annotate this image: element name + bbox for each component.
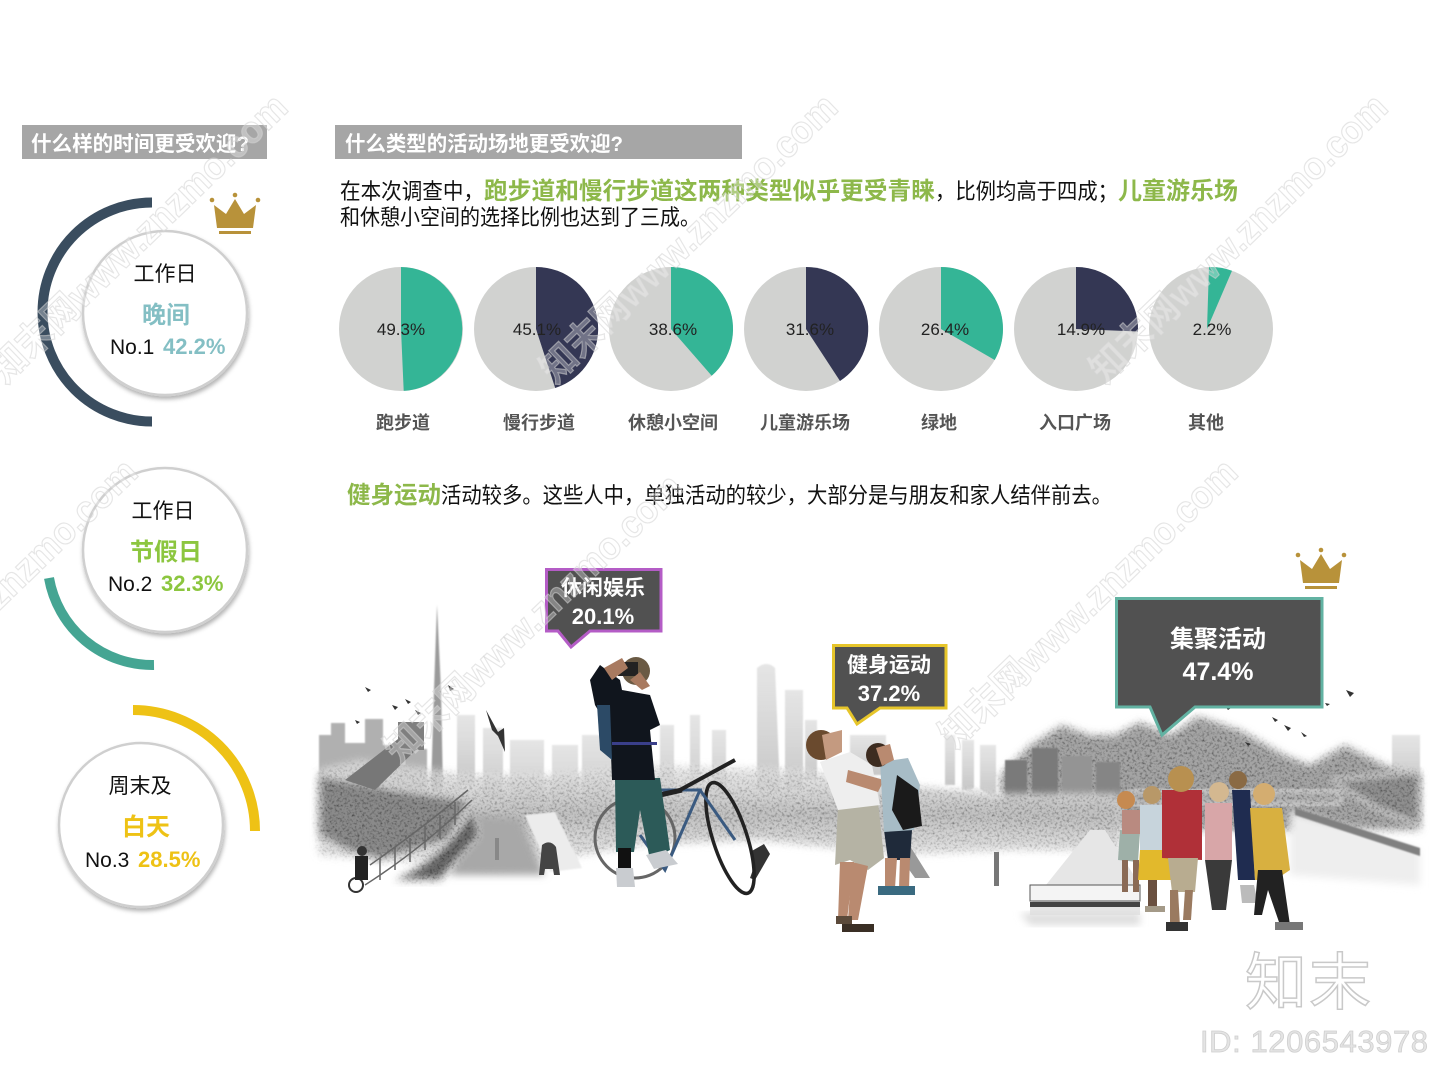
group of people	[1117, 766, 1303, 931]
birds	[355, 685, 1354, 752]
watermark: diagonal site marks: 知末网www.znzmo.com	[377, 466, 691, 771]
pie chart: entrance plaza: 入口广场	[1039, 413, 1111, 433]
callout: gathering 47.4%	[1116, 598, 1322, 735]
pie chart: playground: 儿童游乐场	[760, 412, 850, 433]
pie chart: green space: 26.4%	[921, 320, 969, 339]
city blocks right	[941, 748, 1120, 819]
card: No.2 weekday holiday: 节假日	[130, 539, 202, 566]
card: No.3 weekend daytime	[59, 710, 255, 907]
collage: city and park panorama	[319, 605, 1420, 932]
card: No.1 weekday evening	[43, 202, 247, 422]
heading: venue: 什么类型的活动场地更受欢迎?	[345, 133, 623, 156]
callout: leisure 20.1%: 休闲娱乐	[561, 577, 645, 600]
callout: gathering 47.4%: 47.4%	[1183, 658, 1253, 686]
man in white t-shirt	[806, 730, 884, 932]
pie chart: slow walk	[474, 267, 598, 433]
skyline	[319, 605, 1420, 840]
pie chart: rest space: 38.6%	[649, 320, 697, 339]
river and paths	[450, 815, 545, 875]
text block: venue summary: 在本次调查中，	[340, 179, 484, 204]
card: No.2 weekday holiday: No.2	[108, 573, 152, 596]
card: No.2 weekday holiday	[49, 468, 247, 665]
pie chart: rest space	[609, 267, 733, 433]
steel structure	[345, 722, 424, 790]
callout: leisure 20.1%	[546, 570, 661, 647]
logo: znzmo mark and ID	[1200, 949, 1428, 1059]
pie chart: green space: 绿地	[921, 413, 957, 433]
pie chart: playground: 31.6%	[786, 320, 834, 339]
watermark: diagonal site marks: 知末网www.znzmo.com	[932, 451, 1246, 756]
card: No.3 weekend daytime: 周末及	[108, 775, 172, 798]
card: No.3 weekend daytime: No.3	[85, 849, 129, 872]
icon: crown first place	[210, 193, 260, 234]
small figures	[539, 842, 560, 875]
vegetation band	[319, 760, 1120, 870]
pie chart: rest space: 休憩小空间	[628, 412, 718, 433]
walkway and deck	[888, 830, 930, 878]
card: No.2 weekday holiday: 工作日	[132, 500, 194, 523]
heading: venue	[335, 125, 742, 159]
text block: venue summary: ，比例均高于四成；	[935, 179, 1118, 204]
pie chart: slow walk: 慢行步道	[503, 412, 575, 433]
card: No.1 weekday evening: 42.2%	[163, 334, 225, 359]
logo: znzmo mark and ID: 知末	[1245, 949, 1371, 1018]
text block: activity summary: 健身运动	[347, 482, 441, 509]
text block: venue summary: 儿童游乐场	[1118, 177, 1238, 205]
photographer	[590, 657, 678, 887]
pie chart: other: 其他	[1188, 413, 1224, 433]
panel: venue preference	[335, 125, 1273, 509]
callout: leisure 20.1%: 20.1%	[572, 604, 634, 629]
icon: crown top activity	[1296, 548, 1346, 589]
pie chart: running track: 49.3%	[377, 320, 425, 339]
pie chart: other: 2.2%	[1193, 320, 1231, 339]
pie chart: entrance plaza	[1014, 267, 1138, 433]
text block: venue summary: 和休憩小空间的选择比例也达到了三成。	[340, 205, 700, 230]
bridge	[395, 810, 480, 880]
watermark: diagonal site marks: 知末网www.znzmo.com	[1082, 86, 1396, 391]
logo: znzmo mark and ID: ID: 1206543978	[1200, 1024, 1428, 1059]
heading: time	[22, 125, 267, 159]
card: No.3 weekend daytime: 白天	[122, 814, 170, 841]
card: No.1 weekday evening: No.1	[110, 336, 154, 359]
pie chart: entrance plaza: 14.9%	[1057, 320, 1105, 339]
bicycle	[595, 760, 764, 898]
pie chart: playground	[744, 267, 868, 433]
mountains	[1000, 716, 1420, 830]
text block: activity summary: 活动较多。这些人中，单独活动的较少，大部分是与朋友和家人结伴前去。	[441, 483, 1112, 508]
card: No.1 weekday evening: 工作日	[134, 263, 196, 286]
pie chart: running track	[339, 267, 463, 433]
callout: fitness 37.2%: 健身运动	[847, 654, 931, 677]
watermark: diagonal site marks: 知末网www.znzmo.com	[532, 86, 846, 391]
callout: gathering 47.4%: 集聚活动	[1170, 626, 1266, 653]
text block: venue summary	[340, 177, 1238, 230]
callout: fitness 37.2%: 37.2%	[858, 681, 920, 706]
panel: time preference	[22, 125, 267, 907]
card: No.3 weekend daytime: 28.5%	[138, 847, 200, 872]
heading: time: 什么样的时间更受欢迎?	[31, 133, 249, 156]
cyclist small	[349, 846, 368, 892]
pie chart: running track: 跑步道	[376, 412, 430, 433]
pie chart: slow walk: 45.1%	[513, 320, 561, 339]
man with black bag	[866, 743, 922, 895]
callout: fitness 37.2%	[834, 646, 946, 724]
card: No.2 weekday holiday: 32.3%	[161, 571, 223, 596]
card: No.1 weekday evening: 晚间	[142, 302, 190, 329]
watermark: diagonal site marks	[0, 86, 1396, 771]
pie chart: other	[1149, 267, 1273, 433]
pie chart: green space	[879, 267, 1003, 433]
text block: venue summary: 跑步道和慢行步道这两种类型似乎更受青睐	[484, 178, 935, 205]
